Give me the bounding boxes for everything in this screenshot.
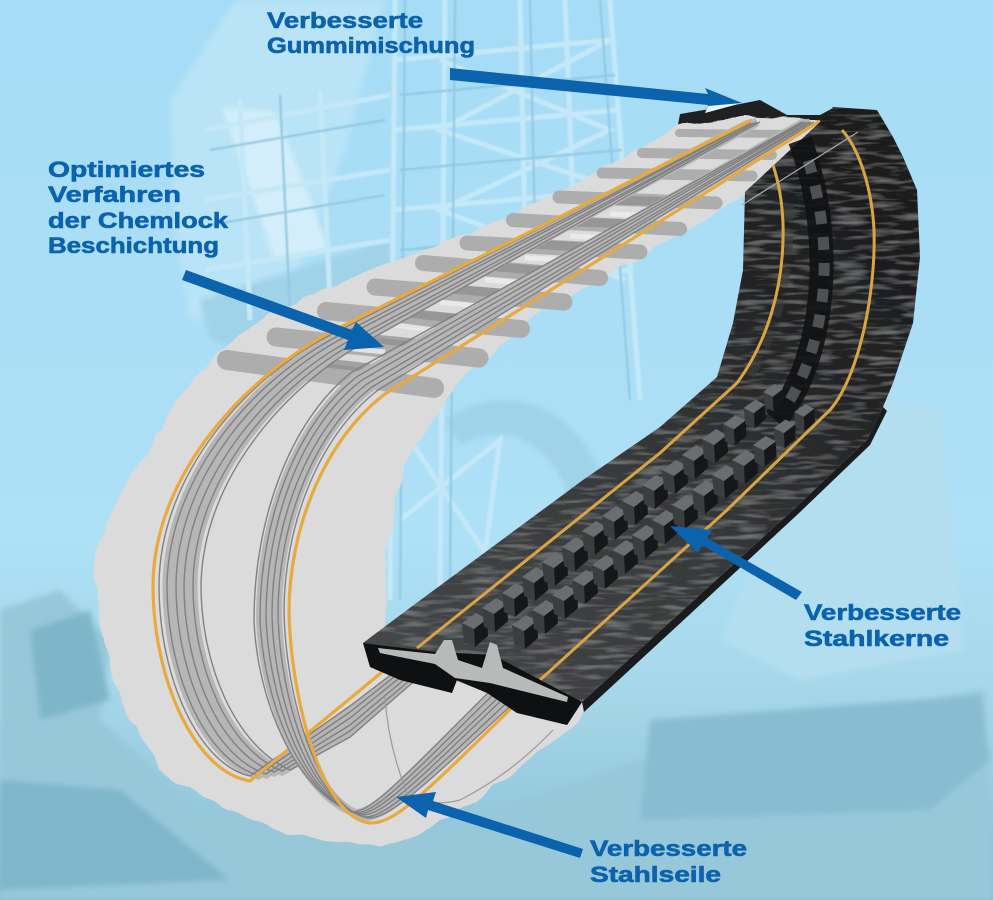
heading: Verbesserte Stahlkerne <box>804 600 961 651</box>
dark underside edge <box>582 407 887 712</box>
arrow: to coating <box>182 270 384 350</box>
heading: Optimiertes Verfahren der Chemlock Beschichtung: Optimiertes <box>48 157 205 182</box>
heading: Verbesserte Gummimischung: Verbesserte <box>267 8 423 33</box>
heading: Verbesserte Gummimischung <box>267 8 475 58</box>
arrow: to steel cables <box>396 792 583 858</box>
arrow: to rubber compound <box>450 68 742 113</box>
arrow: to steel cores <box>670 526 802 600</box>
seam line over track <box>742 132 858 205</box>
heading: Optimiertes Verfahren der Chemlock Beschichtung <box>48 157 229 258</box>
steel core plates <box>227 133 790 388</box>
heading: Verbesserte Stahlseile: Verbesserte <box>590 836 747 861</box>
cut end of track <box>363 640 582 725</box>
center groove on curve <box>775 140 822 420</box>
plate centres: shadows and highlights <box>300 200 680 368</box>
heading: Verbesserte Gummimischung: Gummimischung <box>267 33 475 58</box>
thin seam line on cutaway <box>385 697 553 803</box>
steel cords: right bundle <box>254 122 814 818</box>
guide lugs <box>462 384 815 649</box>
heading: Optimiertes Verfahren der Chemlock Beschichtung: der Chemlock <box>48 208 229 233</box>
heading: Verbesserte Stahlseile: Stahlseile <box>590 862 721 887</box>
track silhouette: light gray cutaway <box>95 116 822 848</box>
steel cords: left bundle <box>159 122 760 776</box>
orange strip: right <box>289 121 820 823</box>
orange strips on track <box>417 130 874 680</box>
track: black rubber body <box>363 107 920 725</box>
heading: Optimiertes Verfahren der Chemlock Beschichtung: Verfahren <box>48 182 181 207</box>
heading: Verbesserte Stahlkerne: Stahlkerne <box>804 626 949 651</box>
heading: Optimiertes Verfahren der Chemlock Beschichtung: Beschichtung <box>48 233 219 258</box>
heading: Verbesserte Stahlseile <box>590 836 747 887</box>
rubber top cut edge <box>677 100 835 130</box>
heading: Verbesserte Stahlkerne: Verbesserte <box>804 600 961 625</box>
orange strip: left <box>153 120 752 781</box>
